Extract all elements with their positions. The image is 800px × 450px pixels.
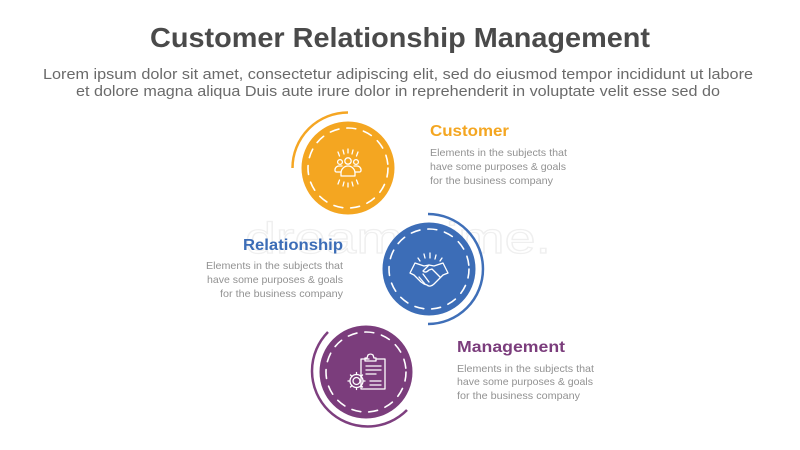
panel: management text: for the business company xyxy=(457,390,581,402)
panel: management circle xyxy=(312,326,412,426)
watermark: dreamstime. xyxy=(245,214,551,263)
panel: relationship text: Relationship xyxy=(243,237,343,254)
orange arc xyxy=(292,112,348,168)
purple arc xyxy=(312,332,407,426)
purple disc xyxy=(320,326,412,418)
intro text: et dolore magna aliqua Duis aute irure dolor in reprehenderit in voluptate velit esse sed do xyxy=(76,83,720,100)
panel: relationship text: for the business company xyxy=(220,288,344,300)
purple dashed ring xyxy=(326,332,406,412)
panel: relationship text xyxy=(206,237,344,300)
intro text xyxy=(43,66,753,100)
panel: relationship text: have some purposes & goals xyxy=(207,274,343,286)
orange dashed ring xyxy=(308,128,388,208)
intro text: Lorem ipsum dolor sit amet, consectetur adipiscing elit, sed do eiusmod tempor incididunt ut labore xyxy=(43,66,753,83)
icon: handshake xyxy=(410,253,448,286)
icon: people xyxy=(335,149,361,187)
panel: customer text: Elements in the subjects that xyxy=(430,147,567,159)
panel: customer text: have some purposes & goals xyxy=(430,161,566,173)
panel: management text xyxy=(457,339,594,402)
icon: clipboard and gear xyxy=(348,354,385,390)
panel: customer text: Customer xyxy=(430,123,509,140)
blue disc xyxy=(382,222,476,316)
panel: relationship text: Elements in the subjects that xyxy=(206,260,343,272)
blue arc xyxy=(428,214,483,324)
blue dashed ring xyxy=(389,229,469,309)
panel: management text: Management xyxy=(457,339,566,356)
panel: management text: have some purposes & goals xyxy=(457,376,593,388)
panel: customer text xyxy=(430,123,567,187)
panel: management text: Elements in the subjects that xyxy=(457,363,594,375)
title: Customer Relationship Management xyxy=(150,22,650,53)
panel: customer circle xyxy=(292,112,394,214)
panel: relationship circle xyxy=(382,214,483,324)
panel: customer text: for the business company xyxy=(430,175,554,187)
orange disc xyxy=(302,122,394,214)
